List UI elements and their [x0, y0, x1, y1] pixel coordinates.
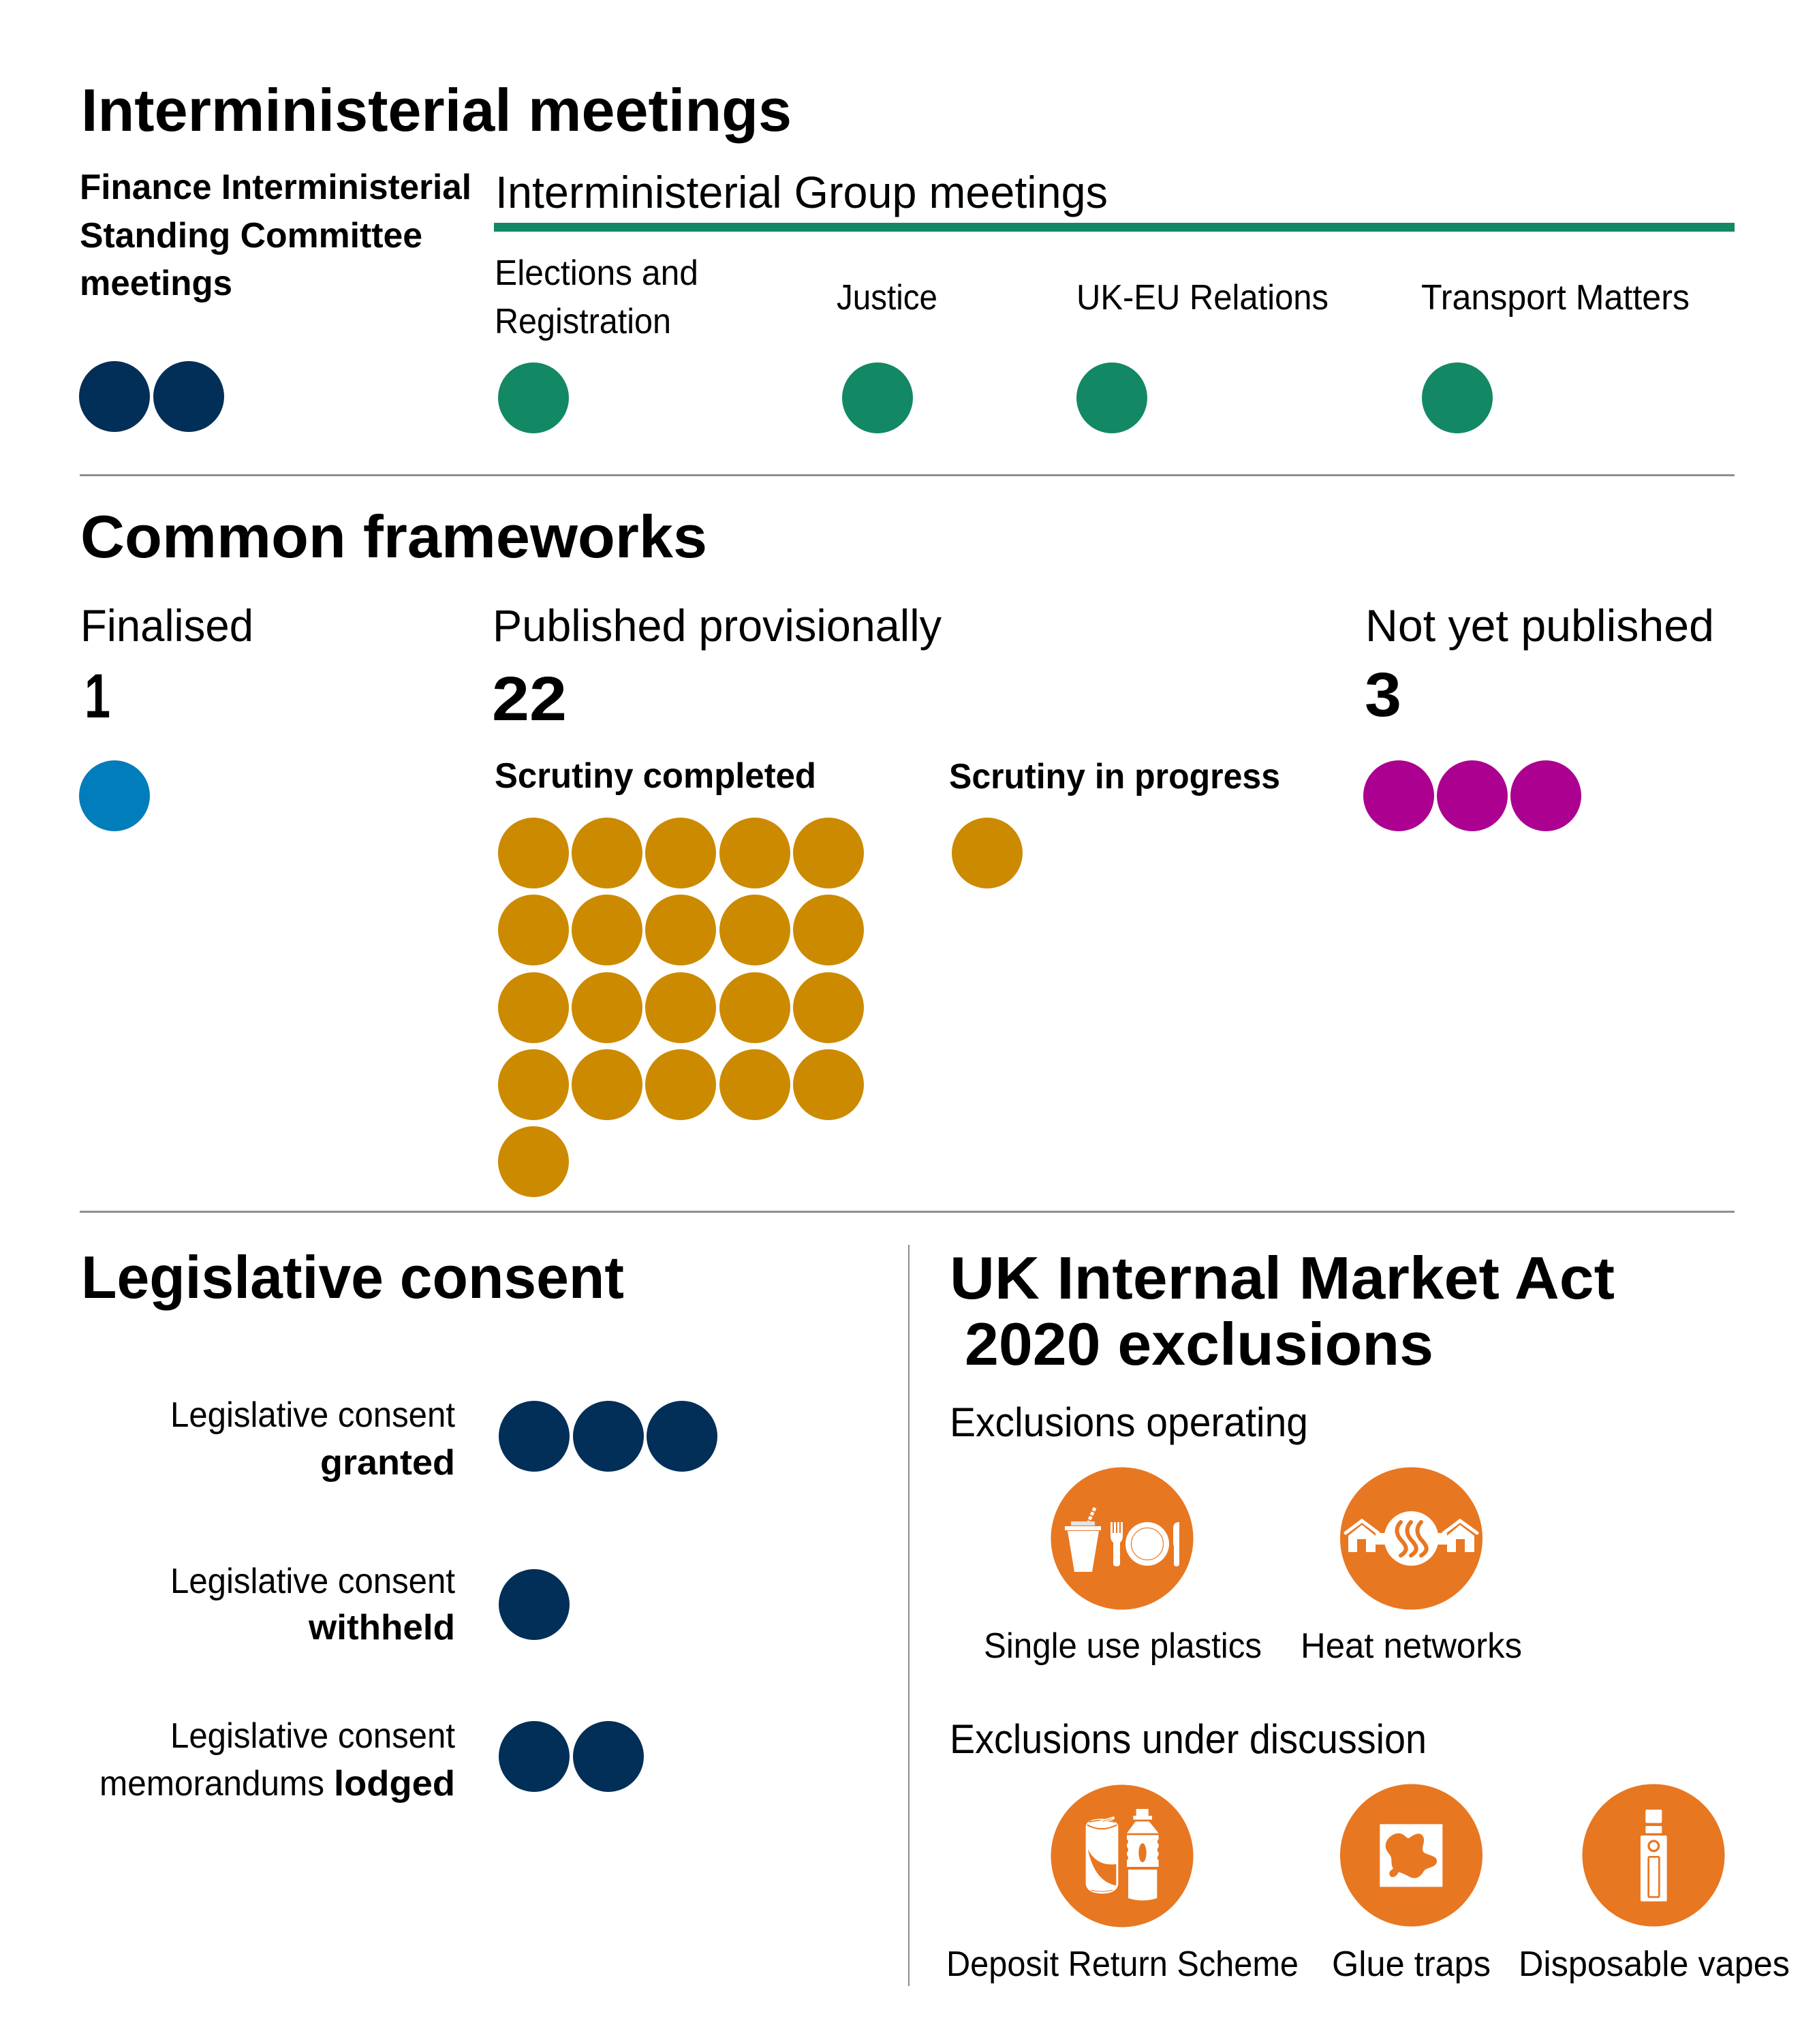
icon: heat networks: [1301, 1468, 1522, 1666]
icon: disposable vapes: [1519, 1784, 1790, 1984]
heading: Interministerial Group meetings: Interministerial Group meetings: [495, 167, 1108, 217]
title: UK Internal Market Act 2020 exclusions: UK Internal Market Act: [950, 1244, 1615, 1312]
group: Justice: [837, 278, 937, 433]
green header bar: [494, 223, 1735, 232]
group: Elections and Registration: Elections and: [495, 253, 698, 293]
title: UK Internal Market Act 2020 exclusions: [950, 1244, 1615, 1378]
subheading: Exclusions under discussion: Exclusions under discussion: [950, 1716, 1427, 1762]
row: consent memorandums lodged: [99, 1716, 644, 1803]
title: Interministerial meetings: Interministerial meetings: [81, 76, 792, 144]
title: Common frameworks: Common frameworks: [80, 503, 707, 570]
row: consent granted: [170, 1395, 717, 1483]
icon: glue traps: [1332, 1784, 1491, 1984]
column: Published provisionally: 22: [492, 664, 567, 734]
row: consent memorandums lodged: memorandums: [99, 1764, 324, 1803]
group: Elections and Registration: [495, 253, 698, 433]
panel: legislative consent: [81, 1243, 717, 1803]
row: consent withheld: withheld: [308, 1608, 455, 1647]
group: Transport Matters: Transport Matters: [1421, 278, 1690, 318]
subcolumn: Scrutiny in progress: [949, 757, 1280, 888]
column: Published provisionally: Published provisionally: [493, 600, 942, 651]
text: Finance Interministerial Standing Committee meetings: meetings: [80, 264, 232, 303]
panel: common frameworks: [79, 503, 1714, 1197]
group: Justice: Justice: [837, 278, 937, 318]
group: UK-EU Relations: [1076, 278, 1329, 433]
column: Published provisionally: [492, 600, 1280, 1197]
subheading: Exclusions operating: Exclusions operating: [950, 1399, 1308, 1445]
subcolumn: Scrutiny completed: [495, 756, 864, 1197]
column: Finalised: 1: [84, 662, 110, 731]
column: Finalised: [79, 600, 253, 831]
column: Not yet published: 3: [1365, 660, 1401, 730]
icon: deposit return scheme: [946, 1785, 1299, 1984]
subcolumn: Scrutiny in progress: Scrutiny in progress: [949, 757, 1280, 796]
row: consent granted: Legislative consent: [170, 1395, 456, 1435]
dots: finance committee meetings: [79, 361, 224, 432]
row: consent withheld: Legislative consent: [170, 1562, 456, 1601]
group: Transport Matters: [1421, 278, 1690, 433]
label: Single use plastics: [984, 1626, 1262, 1666]
group: Elections and Registration: Registration: [495, 302, 671, 341]
label: Deposit Return Scheme: [946, 1945, 1299, 1984]
row: consent granted: granted: [320, 1443, 455, 1483]
title: UK Internal Market Act 2020 exclusions: 2020 exclusions: [965, 1310, 1433, 1378]
column: Not yet published: [1363, 600, 1714, 831]
title: Legislative consent: Legislative consent: [81, 1243, 624, 1311]
row: consent memorandums lodged: lodged: [334, 1764, 455, 1803]
column: Finalised: Finalised: [80, 600, 253, 651]
subcolumn: Scrutiny completed: Scrutiny completed: [495, 756, 816, 796]
label: Heat networks: [1301, 1626, 1522, 1666]
label: Disposable vapes: [1519, 1945, 1790, 1984]
panel: interministerial meetings: [79, 76, 1735, 433]
label: Glue traps: [1332, 1945, 1491, 1984]
panel: UK Internal Market Act exclusions: [946, 1244, 1790, 1984]
icon: single use plastics: [984, 1468, 1262, 1666]
column: Not yet published: Not yet published: [1365, 600, 1714, 651]
row: consent memorandums lodged: Legislative consent: [170, 1716, 456, 1756]
text: Finance Interministerial Standing Committee meetings: [80, 168, 471, 303]
text: Finance Interministerial Standing Committee meetings: Standing Committee: [80, 216, 422, 256]
text: Finance Interministerial Standing Committee meetings: Finance Interministerial: [80, 168, 471, 207]
row: consent withheld: [170, 1562, 570, 1647]
group: UK-EU Relations: UK-EU Relations: [1076, 278, 1329, 318]
